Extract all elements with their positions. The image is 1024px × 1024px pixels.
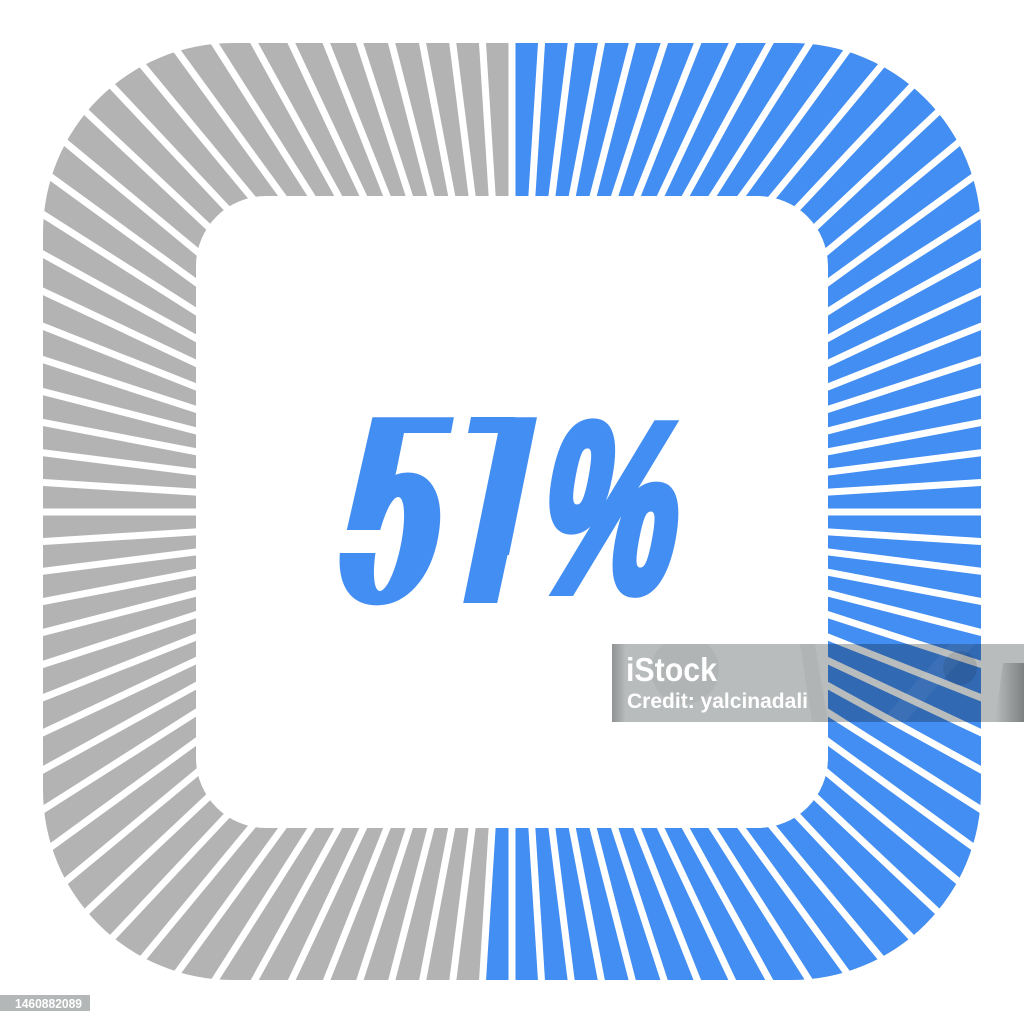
id tag number: 1460882089 bbox=[15, 996, 82, 1011]
watermark band bbox=[612, 636, 1024, 722]
watermark credit: Credit: yalcinadali bbox=[627, 690, 808, 713]
watermark background bbox=[612, 644, 1024, 722]
percentage value bbox=[326, 375, 706, 643]
stock image id tag bbox=[0, 995, 90, 1011]
gauge progress: blue segments bbox=[486, 43, 981, 980]
watermark shading bbox=[612, 636, 1024, 722]
digit one: 1 bbox=[418, 377, 570, 642]
flag of digit one bbox=[468, 417, 515, 433]
watermark logo: iStock bbox=[626, 651, 718, 688]
digit five: 5 bbox=[326, 377, 465, 643]
trim around digit one bbox=[425, 433, 540, 612]
id tag background bbox=[0, 995, 90, 1011]
percent sign: % bbox=[522, 375, 706, 641]
trim inside digit five bbox=[335, 433, 462, 591]
